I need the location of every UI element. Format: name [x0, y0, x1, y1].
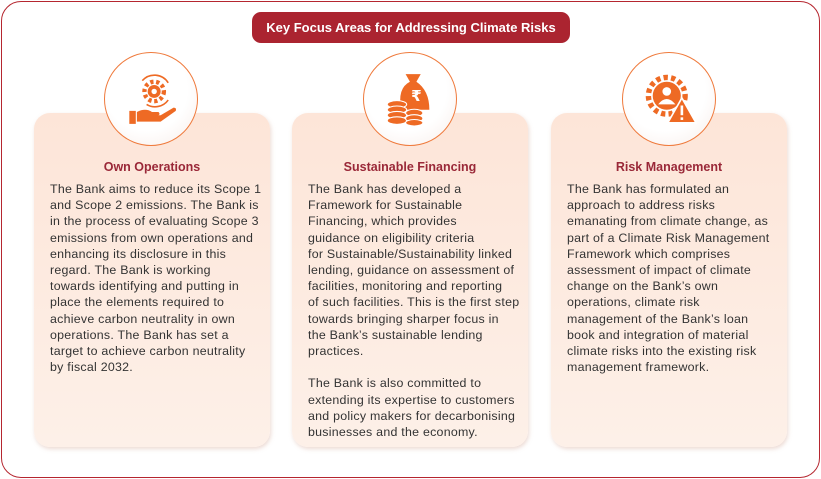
text: towards identifying and putting in	[50, 279, 239, 293]
text: Financing, which provides	[308, 214, 457, 228]
title	[252, 12, 570, 43]
text: The Bank has developed a	[308, 182, 461, 196]
panel: own operations	[34, 113, 270, 447]
text	[308, 182, 519, 439]
text: target to achieve carbon neutrality	[50, 344, 245, 358]
text: of such facilities. This is the first step	[308, 295, 519, 309]
text: practices.	[308, 344, 364, 358]
icon: gear in hand	[104, 52, 198, 146]
text: and Scope 2 emissions. The Bank is	[50, 198, 259, 212]
text: guidance on eligibility criteria	[308, 231, 474, 245]
text: management of the Bank’s loan	[567, 312, 748, 326]
text: part of a Climate Risk Management	[567, 231, 769, 245]
text: by fiscal 2032.	[50, 360, 133, 374]
panel: sustainable financing	[292, 113, 528, 447]
text: emissions from own operations and	[50, 231, 253, 245]
icon: risk gear	[622, 52, 716, 146]
heading: Own Operations	[104, 160, 200, 174]
text: The Bank aims to reduce its Scope 1	[50, 182, 261, 196]
text: regard. The Bank is working	[50, 263, 211, 277]
text: and policy makers for decarbonising	[308, 409, 515, 423]
heading: Risk Management	[616, 160, 722, 174]
text: The Bank is also committed to	[308, 376, 481, 390]
text: emanating from climate change, as	[567, 214, 768, 228]
heading: Sustainable Financing	[344, 160, 476, 174]
text: book and integration of material	[567, 328, 749, 342]
text: for Sustainable/Sustainability linked	[308, 247, 512, 261]
text: place the elements required to	[50, 295, 224, 309]
text	[567, 182, 770, 374]
text: assessment of impact of climate	[567, 263, 751, 277]
text: enhancing its disclosure in this	[50, 247, 226, 261]
text: change on the Bank’s own	[567, 279, 718, 293]
title: Key Focus Areas for Addressing Climate Risks	[266, 20, 556, 35]
icon: money bag	[363, 52, 457, 146]
icon: money bag: ₹	[411, 87, 422, 105]
text: the Bank’s sustainable lending	[308, 328, 483, 342]
text: lending, guidance on assessment of	[308, 263, 514, 277]
text: facilities, monitoring and reporting	[308, 279, 502, 293]
text: operations, climate risk	[567, 295, 700, 309]
text: extending its expertise to customers	[308, 393, 515, 407]
text: approach to address risks	[567, 198, 715, 212]
text: achieve carbon neutrality in own	[50, 312, 235, 326]
text	[50, 182, 261, 374]
text: towards bringing sharper focus in	[308, 312, 499, 326]
panel: risk management	[551, 113, 787, 447]
text: The Bank has formulated an	[567, 182, 729, 196]
text: operations. The Bank has set a	[50, 328, 229, 342]
text: in the process of evaluating Scope 3	[50, 214, 259, 228]
text: businesses and the economy.	[308, 425, 478, 439]
text: Framework for Sustainable	[308, 198, 462, 212]
text: climate risks into the existing risk	[567, 344, 756, 358]
text: management framework.	[567, 360, 709, 374]
text: Framework which comprises	[567, 247, 730, 261]
